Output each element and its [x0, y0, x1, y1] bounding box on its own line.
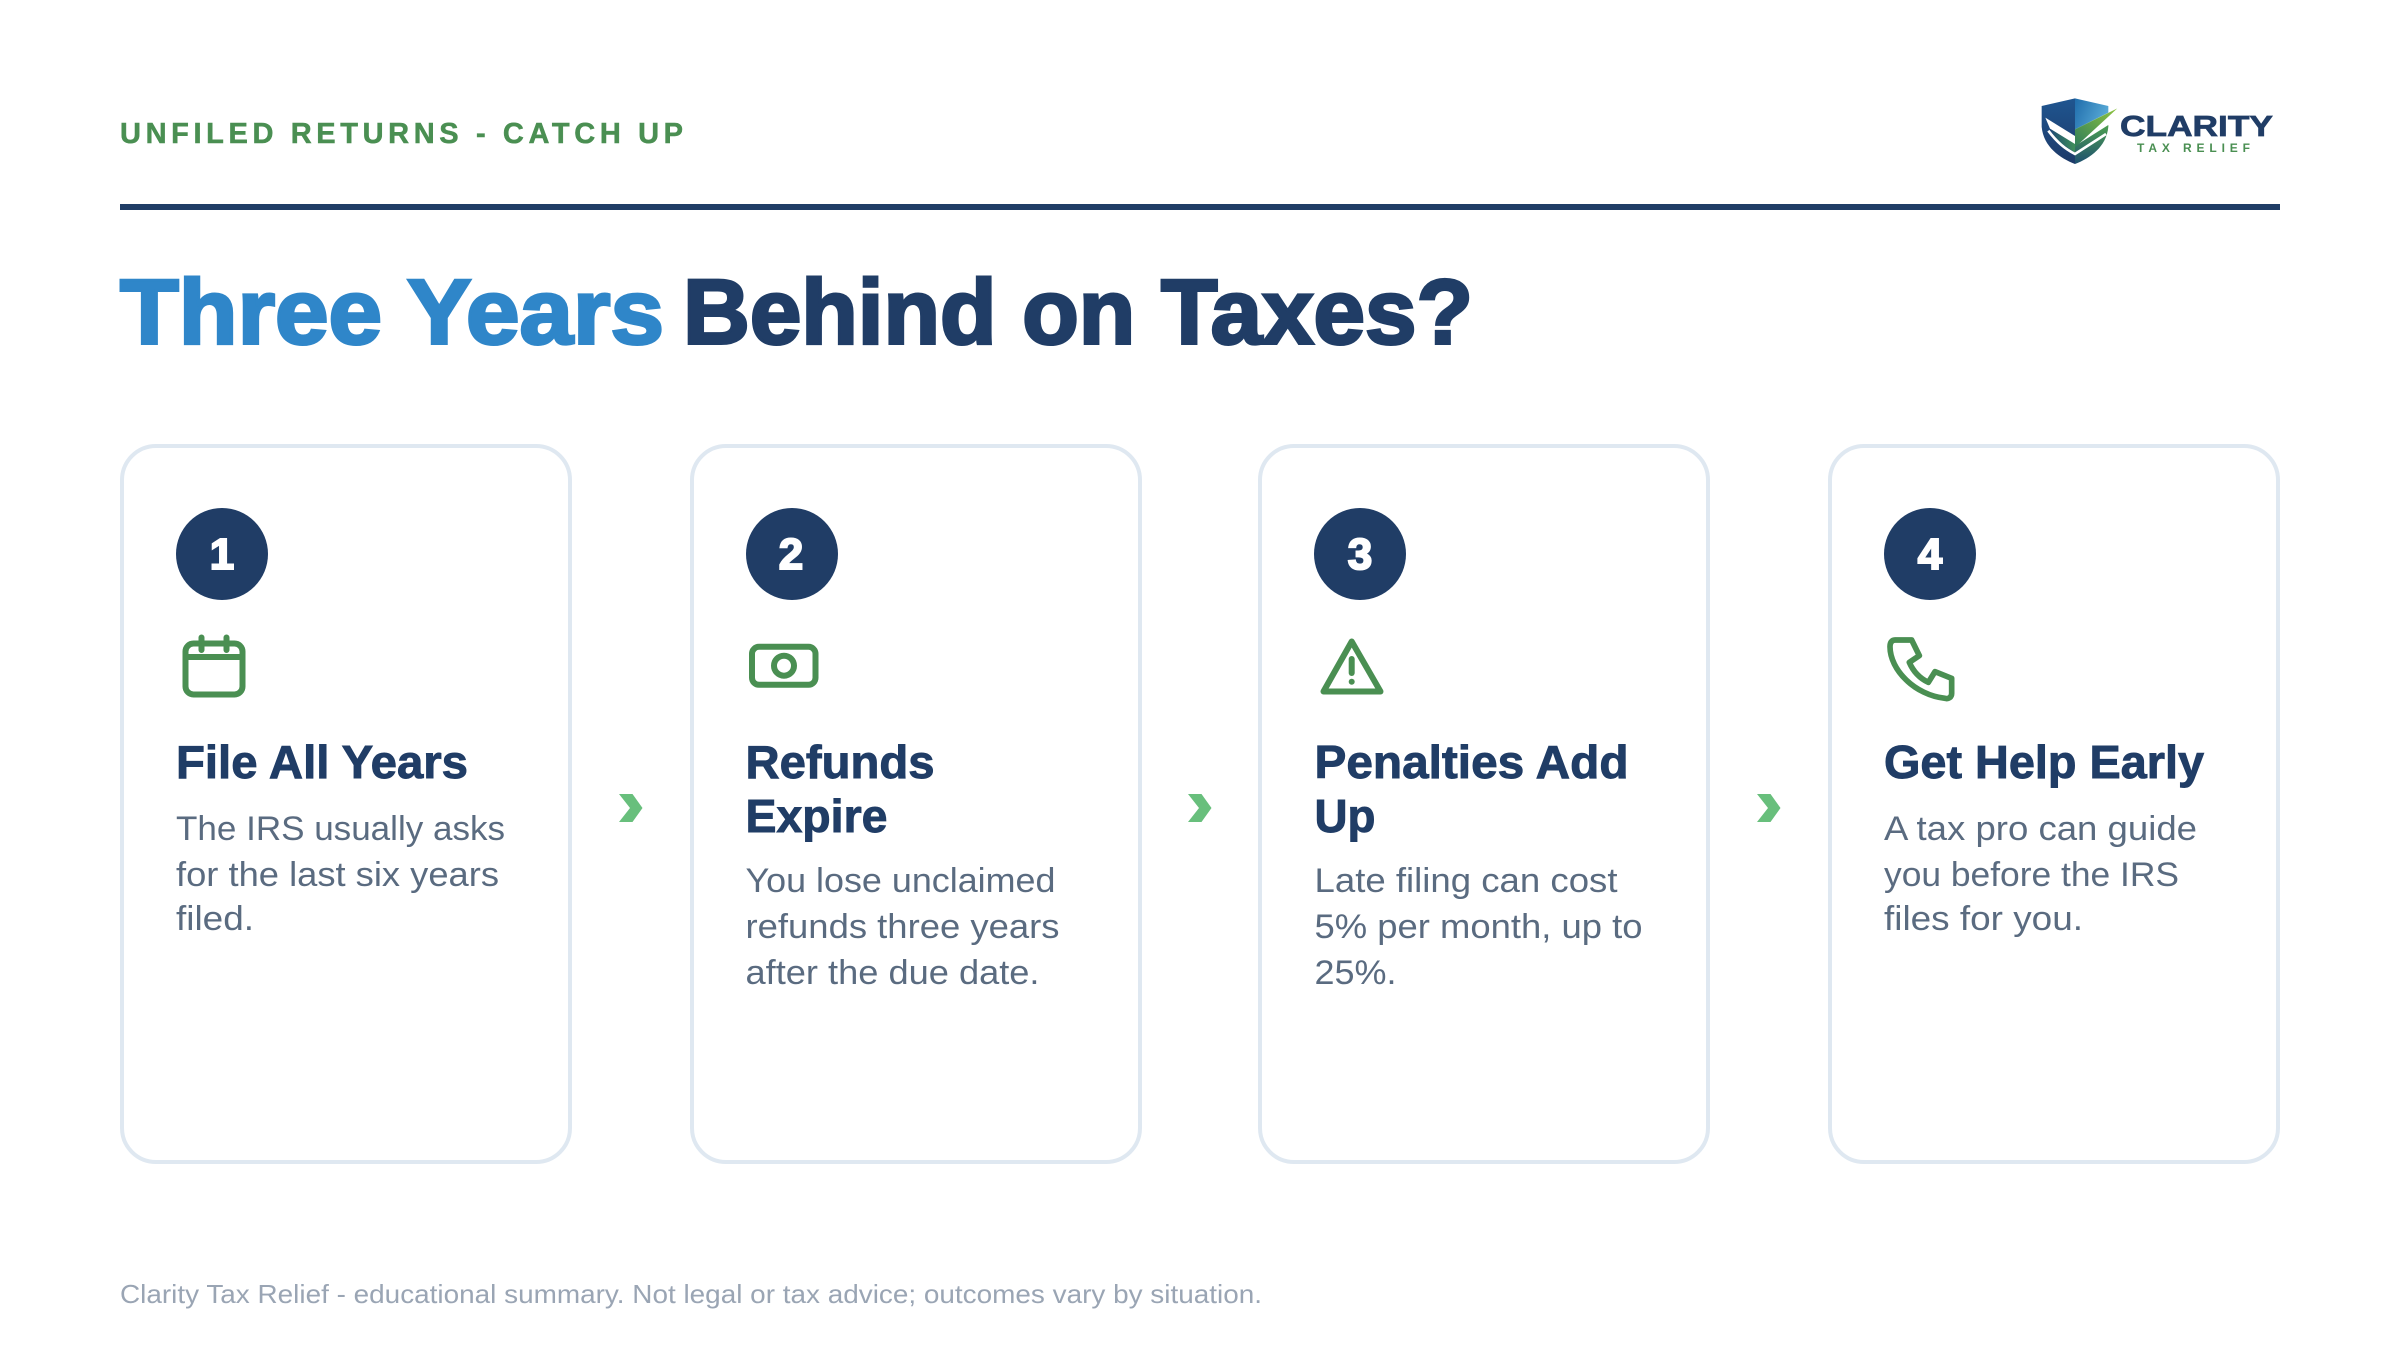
body text: after the due date. — [746, 954, 1040, 992]
body text: you before the IRS — [1884, 856, 2179, 894]
heading: refunds expire: Expire — [746, 790, 888, 842]
step number 4 — [1884, 508, 1976, 600]
logo tagline: TAX RELIEF — [2137, 141, 2250, 155]
body text — [1314, 862, 1642, 992]
logo: Clarity Tax Relief — [2042, 98, 2273, 164]
step number 2 — [746, 508, 838, 600]
footer disclaimer: Clarity Tax Relief - educational summary. Not legal or tax advice; outcomes vary by situation. — [120, 1279, 1262, 1309]
heading: refunds expire: Refunds — [746, 736, 934, 788]
step number 2: 2 — [779, 530, 803, 579]
icon: phone — [1890, 640, 1952, 699]
icon: banknote — [752, 647, 816, 685]
body text — [1884, 810, 2197, 938]
title main: behind on taxes: Behind on Taxes? — [683, 262, 1473, 364]
body text: 5% per month, up to — [1314, 908, 1642, 946]
step number 3 — [1314, 508, 1406, 600]
body text: refunds three years — [746, 908, 1060, 946]
header rule — [120, 204, 2280, 210]
arrow 2 — [1188, 794, 1212, 822]
heading: get help early: Get Help Early — [1884, 736, 2204, 788]
heading: penalties add up — [1314, 736, 1628, 842]
heading: penalties add up: Penalties Add — [1314, 736, 1628, 788]
heading: refunds expire — [746, 736, 934, 842]
step number 4: 4 — [1918, 530, 1943, 579]
panel: step 1 file all years — [122, 446, 570, 1162]
body text — [746, 862, 1060, 992]
title — [120, 262, 1473, 364]
step number 1 — [176, 508, 268, 600]
body text: filed. — [176, 900, 254, 938]
body text — [176, 810, 505, 938]
body text: Late filing can cost — [1314, 862, 1618, 900]
kicker: unfiled returns - catch up: UNFILED RETURNS - CATCH UP — [120, 118, 683, 150]
icon: shield with check mark — [2042, 98, 2117, 164]
panel: step 4 get help early — [1830, 446, 2278, 1162]
heading: penalties add up: Up — [1314, 790, 1376, 842]
arrow 3 — [1757, 794, 1780, 822]
panel: step 3 penalties add up — [1260, 446, 1708, 1162]
body text: You lose unclaimed — [746, 862, 1056, 900]
panel: step 2 refunds expire — [692, 446, 1140, 1162]
body text: for the last six years — [176, 856, 499, 894]
body text: 25%. — [1314, 954, 1396, 992]
body text: files for you. — [1884, 900, 2083, 938]
logo wordmark: CLARITY — [2120, 111, 2273, 143]
body text: The IRS usually asks — [176, 810, 505, 848]
body text: A tax pro can guide — [1884, 810, 2197, 848]
icon: calendar — [186, 638, 242, 694]
step number 1: 1 — [210, 530, 234, 579]
step number 3: 3 — [1348, 530, 1372, 579]
arrow 1 — [619, 794, 642, 822]
title accent: three years: Three Years — [120, 262, 664, 364]
heading: file all years: File All Years — [176, 736, 468, 788]
icon: warning triangle — [1324, 642, 1380, 692]
